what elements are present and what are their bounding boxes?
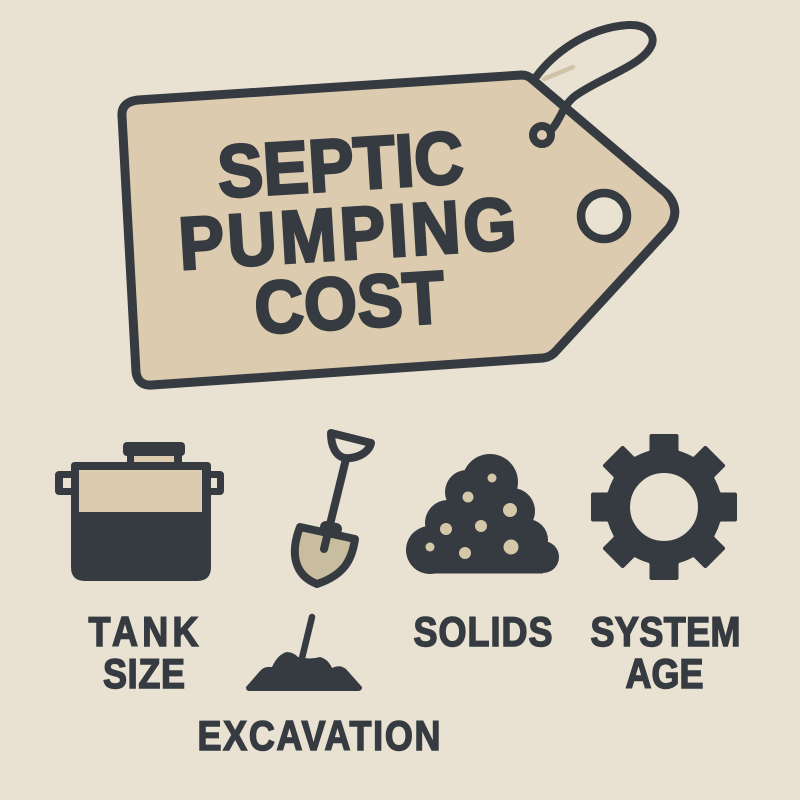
label: tank size — [88, 610, 198, 698]
title: PUMPING — [176, 183, 519, 286]
label: tank size: TANK — [88, 610, 199, 656]
label: system age: SYSTEM — [590, 610, 740, 656]
tag body — [122, 75, 675, 385]
title — [176, 117, 519, 350]
label: system age — [590, 610, 740, 698]
title: SEPTIC — [215, 117, 466, 214]
tag hole — [581, 193, 627, 239]
title: COST — [252, 257, 447, 350]
icon: shovel — [295, 433, 371, 584]
icon: tank — [55, 442, 224, 581]
label: solids: SOLIDS — [414, 610, 552, 656]
tag string eyelet — [533, 126, 551, 144]
icon: gear — [593, 436, 735, 578]
icon: dirt pile — [246, 617, 362, 691]
label: tank size: SIZE — [103, 652, 185, 698]
price tag — [122, 25, 675, 385]
tag string back strand — [544, 67, 573, 79]
icon: solids pile — [406, 454, 559, 574]
label: excavation: EXCAVATION — [198, 714, 440, 760]
label: system age: AGE — [625, 652, 704, 698]
tag string — [536, 25, 653, 131]
